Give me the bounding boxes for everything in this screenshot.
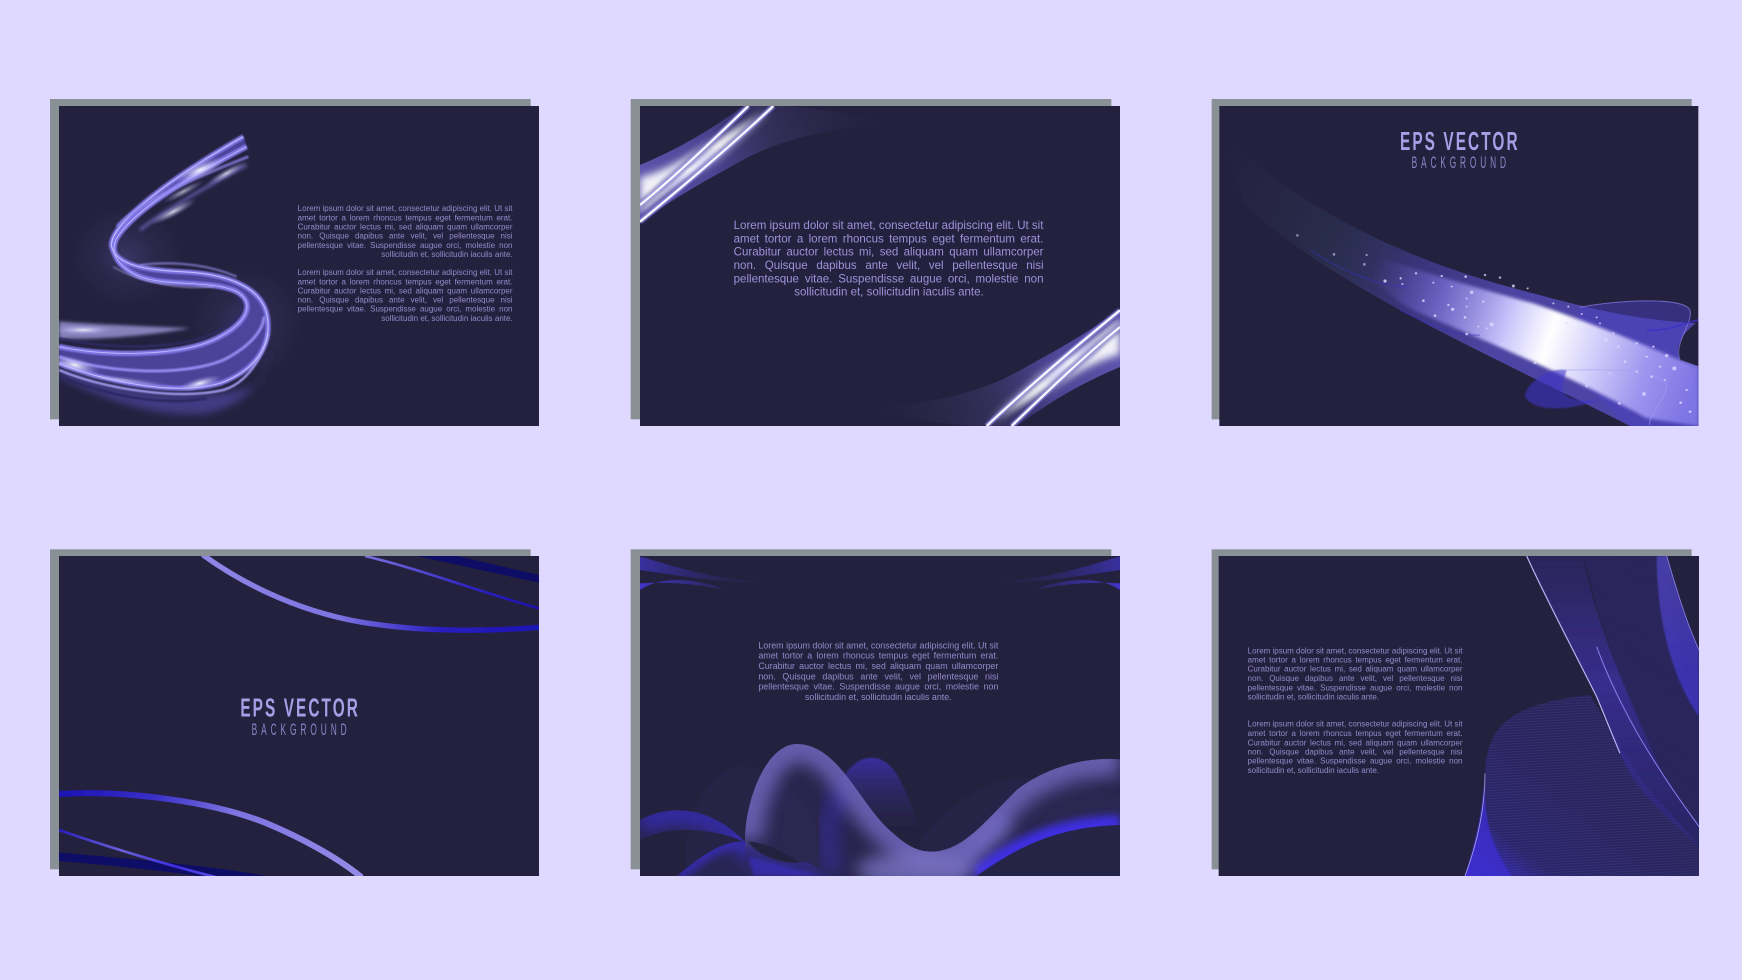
text block: two paragraphs: pellentesque vitae. Suspendisse augue orci, molestie non xyxy=(1248,757,1462,766)
text block: two paragraphs: Curabitur auctor lectus mi, sed aliquam quam ullamcorper xyxy=(1248,665,1463,674)
text block: paragraph: Lorem ipsum dolor sit amet, consectetur adipiscing elit. Ut sit xyxy=(758,640,999,650)
text block: two paragraphs: non. Quisque dapibus ante velit, vel pellentesque nisi xyxy=(298,296,513,305)
curved lines xyxy=(59,555,539,877)
text block: two paragraphs: non. Quisque dapibus ante velit, vel pellentesque nisi xyxy=(298,232,513,241)
text block: two paragraphs: Curabitur auctor lectus mi, sed aliquam quam ullamcorper xyxy=(298,286,513,295)
title: BACKGROUND xyxy=(252,720,347,739)
text block: paragraph: Curabitur auctor lectus mi, sed aliquam quam ullamcorper xyxy=(734,247,1044,259)
text block: paragraph: amet tortor a lorem rhoncus tempus eget fermentum erat. xyxy=(734,233,1043,245)
text block: two paragraphs: Lorem ipsum dolor sit amet, consectetur adipiscing elit. Ut sit xyxy=(298,268,513,277)
left blue wave xyxy=(640,810,832,876)
sparkling band xyxy=(1288,201,1698,426)
text block: two paragraphs: amet tortor a lorem rhoncus tempus eget fermentum erat. xyxy=(1248,656,1462,665)
text block: two paragraphs: sollicitudin et, sollicitudin iaculis ante. xyxy=(381,314,513,323)
text block: paragraph: sollicitudin et, sollicitudin iaculis ante. xyxy=(794,286,984,298)
text block: paragraph xyxy=(758,640,999,702)
title: EPS VECTOR xyxy=(240,695,358,723)
title xyxy=(1400,128,1518,172)
text block: two paragraphs: Lorem ipsum dolor sit amet, consectetur adipiscing elit. Ut sit xyxy=(1248,646,1463,655)
title: BACKGROUND xyxy=(1412,153,1506,172)
text block: two paragraphs: amet tortor a lorem rhoncus tempus eget fermentum erat. xyxy=(298,213,512,222)
mesh ribbons xyxy=(1465,556,1699,876)
text block: paragraph: non. Quisque dapibus ante velit, vel pellentesque nisi xyxy=(734,260,1044,272)
text block: paragraph: sollicitudin et, sollicitudin iaculis ante. xyxy=(805,692,952,702)
waves xyxy=(640,557,1122,888)
text block: two paragraphs: Curabitur auctor lectus mi, sed aliquam quam ullamcorper xyxy=(298,222,513,231)
panel: card 5, flowing waves with centred paragraph xyxy=(631,549,1122,888)
corner light streaks xyxy=(640,106,1120,426)
sparkles xyxy=(1296,234,1691,413)
text block: two paragraphs: pellentesque vitae. Suspendisse augue orci, molestie non xyxy=(298,305,512,314)
text block: two paragraphs: sollicitudin et, sollicitudin iaculis ante. xyxy=(1248,766,1379,775)
text block: two paragraphs: pellentesque vitae. Suspendisse augue orci, molestie non xyxy=(298,241,512,250)
panel: card 4, curved lines with centred title xyxy=(50,549,539,877)
title xyxy=(240,695,358,739)
panel: card 3, sparkling light band with title xyxy=(1212,99,1698,426)
text block: two paragraphs: Lorem ipsum dolor sit amet, consectetur adipiscing elit. Ut sit xyxy=(1248,720,1463,729)
text block: paragraph: pellentesque vitae. Suspendisse augue orci, molestie non xyxy=(758,682,998,692)
text block: paragraph: Curabitur auctor lectus mi, sed aliquam quam ullamcorper xyxy=(758,661,998,671)
text block: two paragraphs: amet tortor a lorem rhoncus tempus eget fermentum erat. xyxy=(298,277,512,286)
title: EPS VECTOR xyxy=(1400,128,1518,156)
text block: two paragraphs: Lorem ipsum dolor sit amet, consectetur adipiscing elit. Ut sit xyxy=(298,204,513,213)
panel: card 2, diagonal corner streaks with centred paragraph xyxy=(631,99,1120,426)
text block: paragraph: non. Quisque dapibus ante velit, vel pellentesque nisi xyxy=(758,671,998,681)
dark lens xyxy=(748,842,798,863)
text block: paragraph: pellentesque vitae. Suspendisse augue orci, molestie non xyxy=(734,273,1043,285)
infographic canvas xyxy=(50,99,1699,876)
text block: two paragraphs: Curabitur auctor lectus mi, sed aliquam quam ullamcorper xyxy=(1248,738,1463,747)
text block: paragraph: amet tortor a lorem rhoncus tempus eget fermentum erat. xyxy=(758,651,998,661)
text block: two paragraphs: sollicitudin et, sollicitudin iaculis ante. xyxy=(381,250,513,259)
text block: two paragraphs xyxy=(298,204,513,323)
text block: two paragraphs: pellentesque vitae. Suspendisse augue orci, molestie non xyxy=(1248,683,1462,692)
light ribbon xyxy=(47,137,303,414)
text block: paragraph xyxy=(734,220,1044,298)
text block: two paragraphs: non. Quisque dapibus ante velit, vel pellentesque nisi xyxy=(1248,747,1463,756)
text block: two paragraphs: sollicitudin et, sollicitudin iaculis ante. xyxy=(1248,692,1379,701)
main ribbon xyxy=(743,743,1122,888)
text block: two paragraphs: amet tortor a lorem rhoncus tempus eget fermentum erat. xyxy=(1248,729,1462,738)
text block: paragraph: Lorem ipsum dolor sit amet, consectetur adipiscing elit. Ut sit xyxy=(734,220,1044,232)
text block: two paragraphs xyxy=(1248,646,1463,775)
text block: two paragraphs: non. Quisque dapibus ante velit, vel pellentesque nisi xyxy=(1248,674,1463,683)
panel: card 1, S-shaped light ribbon with two paragraphs xyxy=(47,99,539,426)
panel: card 6, fine line mesh ribbons with two paragraphs xyxy=(1212,549,1699,876)
